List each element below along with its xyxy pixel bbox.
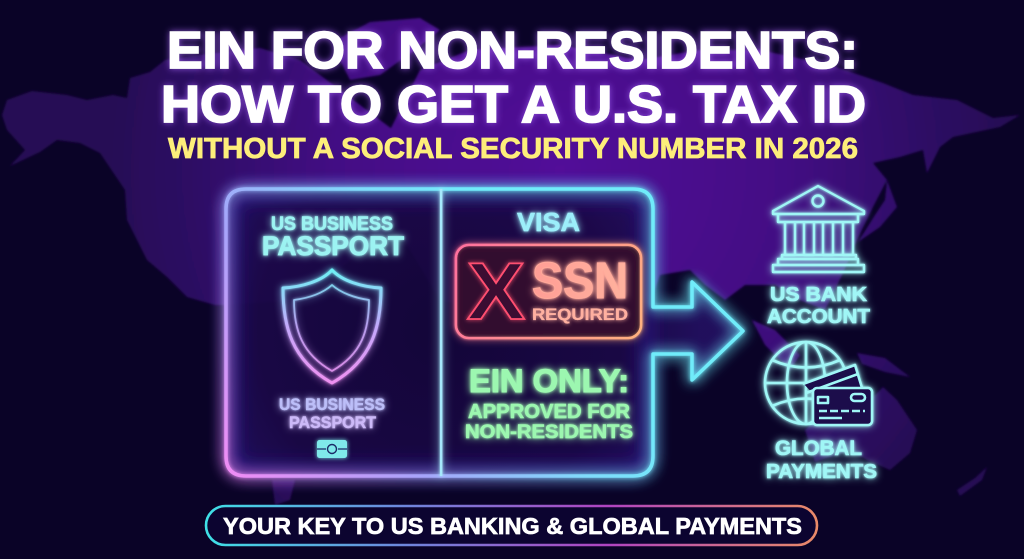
icon: globe and cards — [765, 342, 872, 425]
arrow and outline — [226, 189, 743, 476]
title line 2: HOW TO GET A U.S. TAX ID — [161, 76, 866, 134]
icon: chip — [317, 440, 347, 458]
red box — [456, 245, 641, 338]
pill outline — [206, 506, 817, 545]
passport label lower line 1: US BUSINESS — [279, 395, 385, 414]
approved line 1: APPROVED FOR — [468, 401, 631, 423]
visa heading: VISA — [517, 207, 580, 237]
map: greenland — [340, 18, 440, 80]
panel: passport outline with arrow — [226, 189, 743, 476]
benefit: global payments — [765, 342, 877, 483]
spine divider — [440, 189, 442, 476]
map: north america — [2, 48, 440, 305]
pill text: YOUR KEY TO US BANKING & GLOBAL PAYMENTS — [223, 513, 802, 539]
callout: ssn required — [456, 245, 641, 338]
map: south america fragment — [272, 480, 295, 505]
panel: visa right page — [456, 207, 641, 443]
account label: ACCOUNT — [767, 306, 870, 328]
inner blue glow — [232, 195, 647, 470]
us bank label: US BANK — [770, 284, 868, 306]
map: australia — [805, 387, 917, 470]
passport label lower line 2: PASSPORT — [289, 413, 377, 432]
title — [161, 22, 866, 165]
map: eurasia and africa — [380, 45, 1020, 330]
map: new zealand — [957, 467, 987, 496]
subtitle: WITHOUT A SOCIAL SECURITY NUMBER IN 2026 — [168, 133, 858, 165]
ein only heading: EIN ONLY: — [469, 363, 629, 399]
icon: bank — [773, 186, 864, 272]
approved line 2: NON-RESIDENTS — [465, 422, 633, 443]
footer pill — [206, 506, 817, 545]
passport heading large: PASSPORT — [262, 231, 404, 261]
passport heading small: US BUSINESS — [271, 214, 393, 235]
panel background — [226, 189, 743, 476]
payments label: PAYMENTS — [766, 461, 877, 483]
icon: x mark: X — [467, 247, 525, 337]
icon: shield — [283, 270, 381, 383]
title line 1: EIN FOR NON-RESIDENTS: — [167, 22, 858, 80]
map: japan — [858, 180, 897, 242]
global label: GLOBAL — [775, 437, 862, 460]
benefit: us bank account — [767, 186, 870, 328]
ssn text: SSN — [532, 252, 628, 309]
panel: passport left page — [262, 214, 404, 458]
required text: REQUIRED — [532, 305, 628, 324]
map: south east asia — [752, 320, 800, 370]
map: new guinea — [857, 353, 910, 377]
